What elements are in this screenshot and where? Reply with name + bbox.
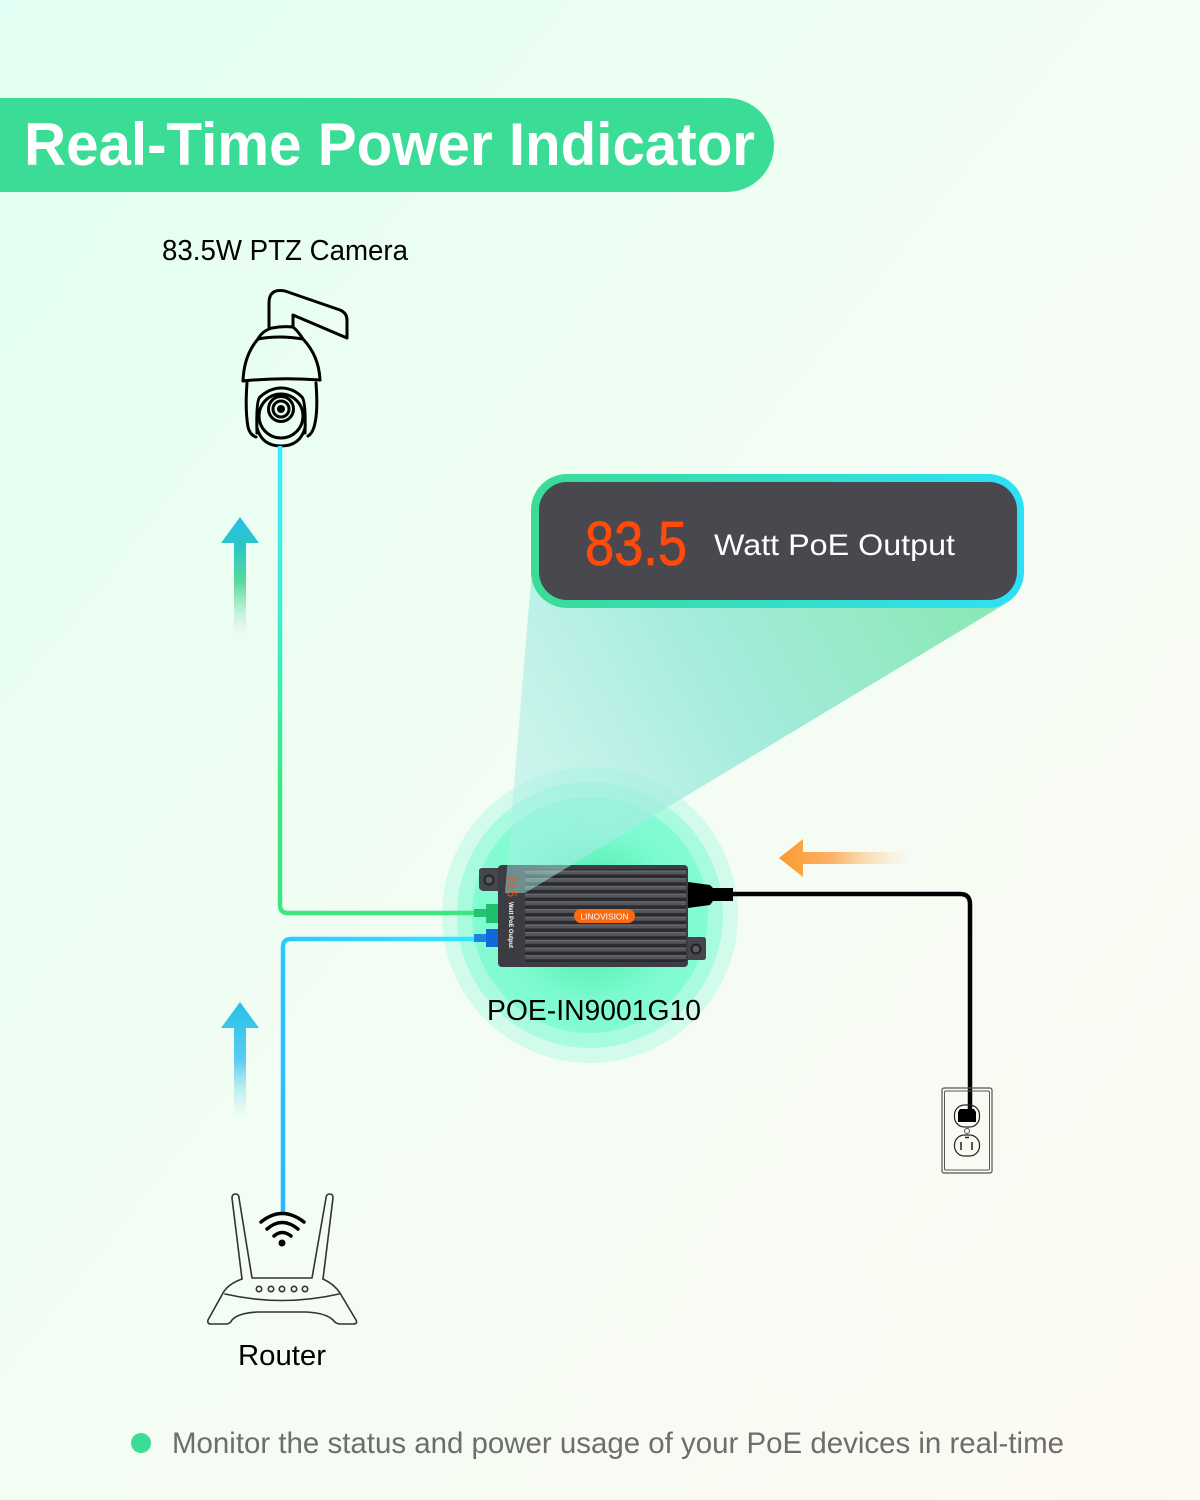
power plug: [688, 882, 733, 908]
logo pill: [574, 909, 635, 923]
green port: [474, 904, 499, 923]
wire: camera to injector: [280, 446, 476, 913]
callout panel: [531, 474, 1024, 608]
logo pill: LINOVISION: [580, 912, 628, 922]
camera label: 83.5W PTZ Camera: [162, 235, 409, 267]
light beam from display: [505, 580, 1005, 893]
glow circles behind injector: [442, 767, 738, 1063]
blue port: [474, 929, 499, 947]
footnote text: Monitor the status and power usage of your PoE devices in real-time: [172, 1427, 1064, 1460]
display digits on device: 83.5: [504, 877, 520, 897]
footnote bullet: [131, 1433, 151, 1453]
wire: router to injector: [283, 939, 476, 1215]
arrow: up to camera: [221, 517, 259, 636]
device: PoE injector: [474, 865, 733, 967]
power reading: 83.5: [585, 510, 687, 579]
device label: POE-IN9001G10: [487, 995, 701, 1027]
ribbed heat sink: [525, 869, 686, 962]
mounting tab right: [685, 937, 706, 960]
router label: Router: [238, 1340, 326, 1372]
arrow: up from router: [221, 1002, 259, 1118]
arrow: power flow from outlet: [779, 839, 910, 877]
icon: PTZ camera: [243, 290, 347, 446]
title banner: [0, 98, 774, 192]
icon: router: [208, 1194, 357, 1324]
screws: [484, 876, 700, 954]
title banner: Real-Time Power Indicator: [24, 111, 755, 178]
device text: Watt PoE Output: [507, 902, 513, 948]
icon: wifi: [261, 1214, 304, 1246]
injector body: [498, 865, 688, 967]
reading unit: Watt PoE Output: [714, 529, 956, 562]
power cord: [733, 894, 970, 1112]
icon: wall outlet: [942, 1088, 992, 1173]
mounting tab left: [479, 868, 500, 891]
